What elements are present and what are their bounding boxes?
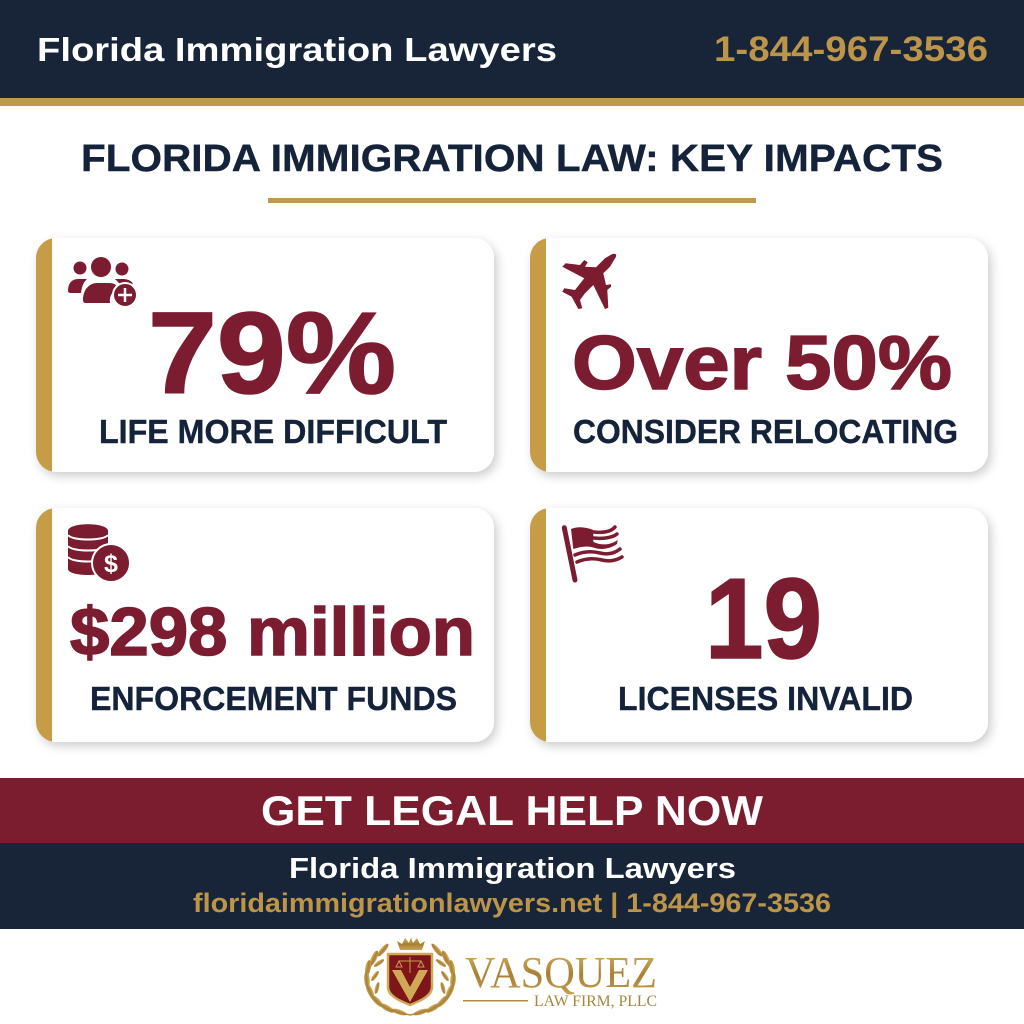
stat: over 50%: Over 50% (572, 321, 952, 406)
call to action heading: GET LEGAL HELP NOW (261, 787, 763, 834)
main title: FLORIDA IMMIGRATION LAW: KEY IMPACTS (81, 138, 943, 180)
icon: coins with dollar: $ (104, 550, 118, 578)
logo rule (463, 1000, 528, 1002)
logo shield scales (396, 957, 424, 973)
footer firm name: Florida Immigration Lawyers (289, 853, 736, 885)
label: life more difficult: LIFE MORE DIFFICULT (99, 413, 447, 450)
logo crown (397, 937, 425, 950)
logo: Vasquez Law Firm (364, 937, 657, 1017)
logo shield monogram (392, 970, 428, 1002)
stat: $298 million: $298 million (70, 594, 475, 670)
logo shield (388, 954, 432, 1005)
logo laurel wreath (364, 942, 456, 1017)
panel: enforcement funds (36, 508, 494, 742)
header phone number: 1-844-967-3536 (714, 30, 988, 69)
panel: consider relocating (530, 238, 988, 472)
icon: airplane (562, 254, 616, 309)
header firm name: Florida Immigration Lawyers (37, 31, 557, 68)
contact footer band (0, 843, 1024, 929)
panel: licenses invalid (530, 508, 988, 742)
label: enforcement funds: ENFORCEMENT FUNDS (90, 680, 457, 717)
label: licenses invalid: LICENSES INVALID (618, 680, 913, 717)
title underline (268, 198, 756, 203)
label: consider relocating: CONSIDER RELOCATING (573, 413, 958, 450)
icon: flag (564, 527, 622, 580)
call to action band (0, 778, 1024, 843)
stat: 19: 19 (705, 556, 822, 683)
stat: 79%: 79% (148, 288, 396, 418)
logo subtitle: LAW FIRM, PLLC (534, 993, 657, 1010)
icon: coins with dollar (68, 524, 130, 582)
footer website and phone: floridaimmigrationlawyers.net | 1-844-967-3536 (193, 888, 831, 918)
logo wordmark: VASQUEZ (465, 948, 657, 997)
header bar (0, 0, 1024, 106)
icon: people with plus (68, 257, 137, 307)
panel: life more difficult (36, 238, 494, 472)
